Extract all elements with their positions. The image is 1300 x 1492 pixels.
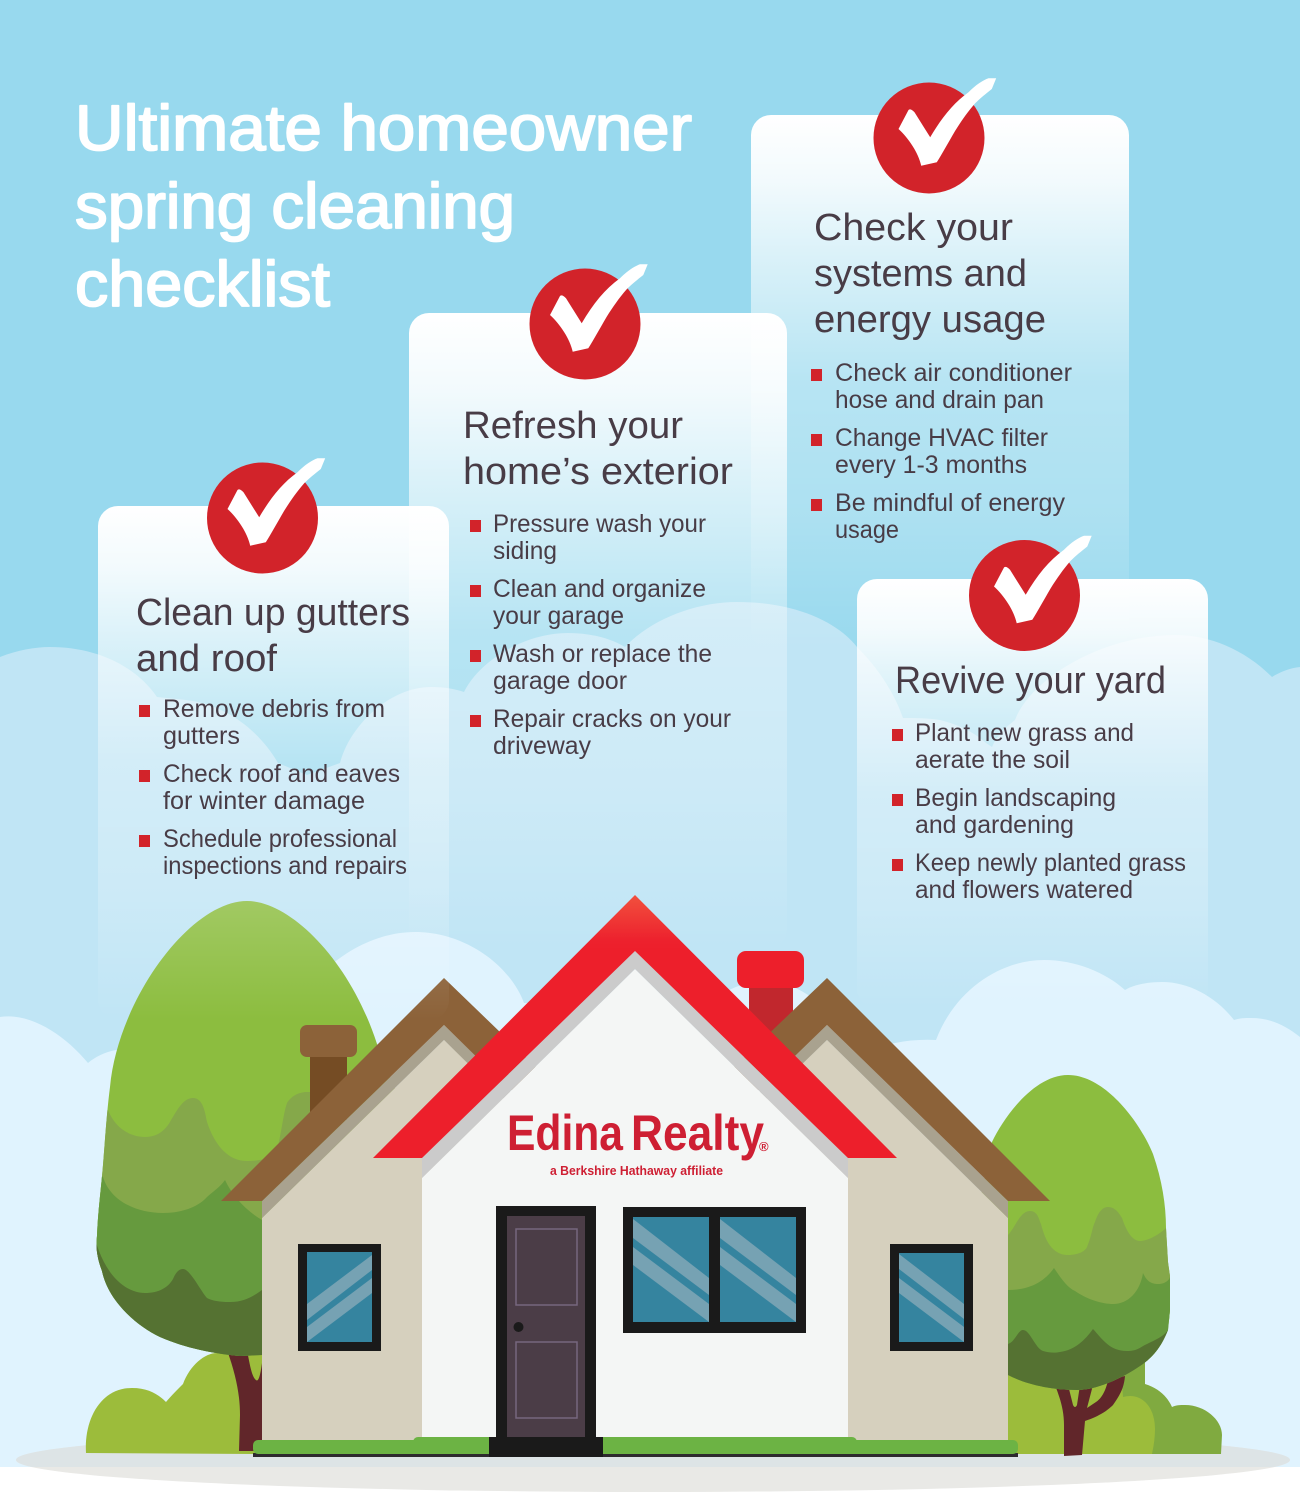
logo: Realty [631,1105,764,1161]
panel background [857,579,1208,1009]
checklist: driveway [493,732,591,760]
checklist: Plant new grass and [915,719,1134,747]
checklist: Check air conditioner [835,359,1072,387]
checklist: siding [493,537,557,565]
checklist: Remove debris from [163,695,385,723]
left tree third foliage layer [96,1176,262,1356]
logo: Edina [507,1105,624,1161]
icon: red check [207,458,325,574]
checklist: hose and drain pan [835,386,1044,414]
heading: Refresh your [463,405,683,447]
icon: red check [874,78,996,194]
main roof underside [422,951,848,1178]
left window [298,1244,381,1351]
heading: Revive your yard [895,660,1166,702]
title: checklist [75,248,330,320]
icon: red check [530,264,648,380]
checklist: garage door [493,667,627,695]
right tree top foliage [982,1075,1170,1390]
heading: Clean up gutters [136,592,410,634]
right window [890,1244,973,1351]
title: Ultimate homeowner [75,92,692,164]
panel: refresh exterior [409,264,787,950]
checklist [139,695,407,880]
back clouds [0,602,1300,1492]
right tree third foliage layer [1008,1268,1170,1390]
ground ellipse [16,1428,1290,1492]
heading: Check your [814,207,1013,249]
main wall [422,969,848,1440]
checklist: aerate the soil [915,746,1070,774]
left tree top foliage [90,895,410,1365]
left wing chimney [300,1025,357,1120]
front door [496,1206,596,1441]
heading: systems and [814,253,1027,295]
checklist: Be mindful of energy [835,489,1066,517]
checklist [470,510,731,760]
right tree foliage [982,1075,1170,1390]
checklist: for winter damage [163,787,365,815]
checklist: Clean and organize [493,575,706,603]
house [221,895,1050,1457]
front clouds [0,932,1300,1467]
logo [507,1105,769,1178]
right tree dark foliage layer [1008,1329,1168,1390]
heading [136,592,410,680]
checklist: Wash or replace the [493,640,712,668]
left tree trunk [227,1350,262,1451]
right tree and bushes [970,1070,1222,1456]
checklist: your garage [493,602,624,630]
panel: check your systems [751,78,1129,650]
logo: a Berkshire Hathaway affiliate [550,1164,723,1178]
checklist: Repair cracks on your [493,705,731,733]
white ground strip [0,1467,1300,1492]
main red roof [373,895,897,1158]
title: spring cleaning [75,170,515,242]
logo: ® [759,1139,769,1154]
checklist: Begin landscaping [915,784,1116,812]
panel background [98,506,449,1020]
left tree second foliage layer [95,1092,330,1300]
left wing roof [221,978,560,1218]
panel background [751,115,1129,650]
checklist: and flowers watered [915,876,1133,904]
checklist [892,719,1186,904]
panel: gutters and roof [98,458,449,1020]
heading: energy usage [814,299,1046,341]
checklist: Schedule professional [163,825,397,853]
left bushes [86,1353,262,1454]
panel background [409,313,787,950]
checklist: usage [835,516,899,544]
heading [463,405,733,493]
checklist: and gardening [915,811,1074,839]
checklist: Change HVAC filter [835,424,1048,452]
checklist: Pressure wash your [493,510,706,538]
panel: revive yard [857,536,1208,1009]
right tree trunk [1055,1376,1125,1456]
right tree second foliage layer [1000,1207,1175,1320]
left tree dark foliage layer [96,1244,262,1356]
right wing roof [710,978,1050,1218]
heading [814,207,1046,341]
checklist: Check roof and eaves [163,760,400,788]
title [75,92,692,320]
left tree foliage [90,895,410,1365]
right light bush [1008,1360,1155,1454]
heading: and roof [136,638,277,680]
door step [489,1437,603,1457]
grass strip [253,1437,1018,1457]
left tree and bushes [86,895,410,1454]
checklist [811,359,1072,544]
checklist: inspections and repairs [163,852,407,880]
right wing wall [650,1040,1008,1440]
checklist: Keep newly planted grass [915,849,1186,877]
heading: home’s exterior [463,451,733,493]
large front window [623,1207,806,1333]
checklist: every 1-3 months [835,451,1027,479]
checklist: gutters [163,722,240,750]
icon: red check [969,536,1092,651]
right side red chimney [737,951,804,1070]
left wing wall [262,1040,620,1440]
right dark bush [1110,1340,1222,1454]
